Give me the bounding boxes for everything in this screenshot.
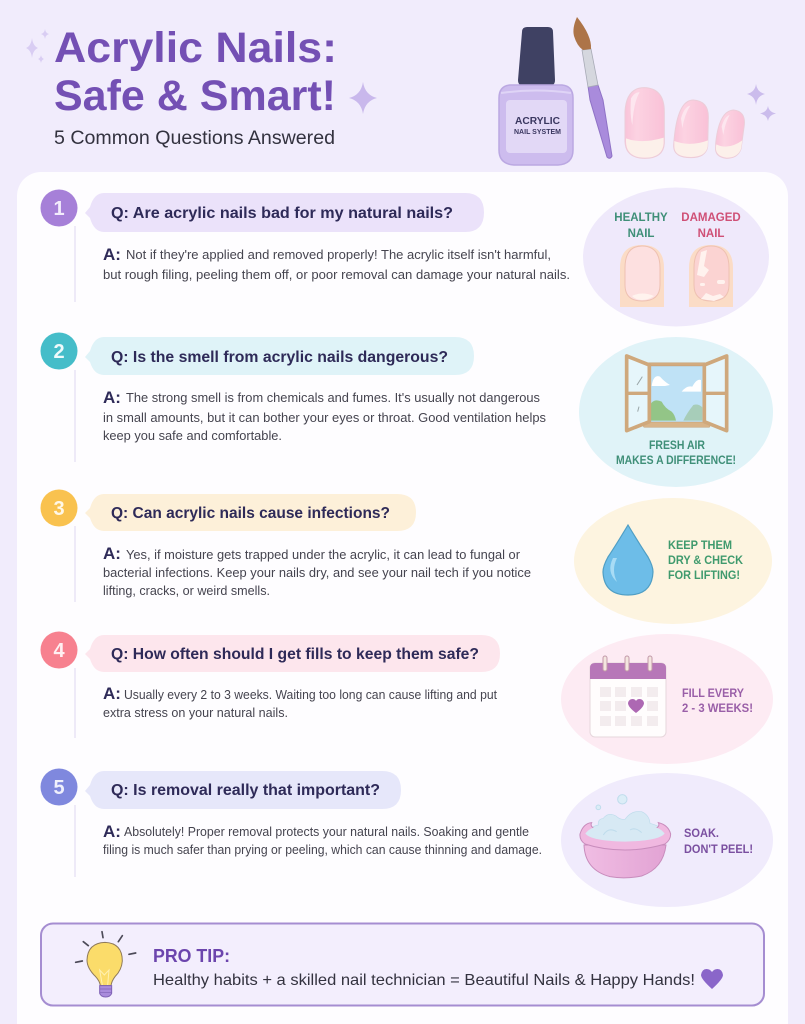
question text 5: Q: Is removal really that important? (111, 782, 380, 799)
title: Acrylic Nails: (54, 24, 337, 72)
title: Safe & Smart! (54, 72, 336, 120)
number badge 3: 3 (53, 498, 65, 520)
icon: soaking bowl (580, 795, 671, 878)
answer 2: keep you safe and comfortable. (103, 429, 282, 443)
panel: nail comparison bubble (583, 188, 769, 326)
panel: question 4 (40, 632, 500, 738)
answer 5 (103, 822, 542, 857)
answer 4: extra stress on your natural nails. (103, 706, 288, 720)
pro tip heading: PRO TIP: (153, 946, 230, 966)
icon: header sparkles right (747, 84, 776, 121)
question pill 4 (85, 635, 500, 672)
panel: question 3 (40, 490, 531, 602)
answer 5: Absolutely! Proper removal protects your natural nails. Soaking and gentle (124, 825, 529, 839)
icon: water drop (603, 525, 653, 595)
keep dry caption: FOR LIFTING! (668, 570, 740, 582)
answer 1: Not if they're applied and removed properly! The acrylic itself isn't harmful, (126, 248, 551, 262)
damaged nail label (681, 212, 741, 240)
healthy nail label: NAIL (628, 228, 654, 240)
question pill 1 (85, 193, 484, 232)
answer 5: filing is much safer than prying or peeling, which can cause thinning and damage. (103, 843, 542, 857)
icon: damaged nail (689, 245, 733, 307)
question pill 3 (85, 494, 416, 531)
subtitle: 5 Common Questions Answered (54, 128, 335, 149)
fill caption: FILL EVERY (682, 688, 744, 700)
soak caption: DON'T PEEL! (684, 844, 753, 856)
soak caption (684, 828, 753, 856)
soak caption: SOAK. (684, 828, 719, 840)
number badge 5 (40, 768, 78, 806)
fill caption (682, 688, 753, 715)
keep dry caption: KEEP THEM (668, 540, 732, 552)
panel: keep dry bubble (574, 498, 772, 624)
icon: nail polish bottle (499, 27, 573, 165)
label text: ACRYLIC (515, 115, 560, 127)
panel: question 1 (40, 190, 570, 302)
keep dry caption (668, 540, 744, 582)
question text 3: Q: Can acrylic nails cause infections? (111, 505, 390, 522)
number badge 1 (40, 190, 78, 226)
answer 3 (103, 544, 531, 598)
question pill 2 (85, 337, 474, 375)
answer 2 (103, 388, 546, 443)
number badge 5: 5 (53, 777, 65, 799)
answer 2: The strong smell is from chemicals and fumes. It's usually not dangerous (126, 391, 540, 405)
icon: title sparkles (26, 29, 49, 63)
answer 4: A: (103, 684, 121, 703)
healthy nail label (614, 212, 668, 240)
damaged nail label: DAMAGED (681, 212, 741, 224)
number badge 2 (40, 332, 78, 370)
keep dry caption: DRY & CHECK (668, 555, 744, 567)
icon: three acrylic nails (625, 88, 744, 158)
panel: fill schedule bubble (561, 634, 773, 764)
answer 4: Usually every 2 to 3 weeks. Waiting too long can cause lifting and put (124, 688, 498, 702)
number badge 2: 2 (53, 341, 65, 363)
panel: soak bubble (561, 773, 773, 907)
title (54, 24, 337, 120)
number badge 4 (40, 632, 78, 668)
question text 4: Q: How often should I get fills to keep them safe? (111, 646, 479, 663)
answer 5: A: (103, 822, 121, 841)
answer 3: A: (103, 544, 121, 563)
icon: brush (573, 17, 612, 158)
panel: question 5 (40, 768, 542, 877)
fill caption: 2 - 3 WEEKS! (682, 703, 753, 715)
answer 3: bacterial infections. Keep your nails dry, and see your nail tech if you notice (103, 566, 531, 580)
panel: fresh air bubble (579, 337, 773, 487)
label text (514, 115, 561, 136)
icon: healthy nail (620, 245, 664, 307)
damaged nail label: NAIL (698, 228, 724, 240)
panel: pro tip (41, 924, 764, 1006)
pro tip text: Healthy habits + a skilled nail technician = Beautiful Nails & Happy Hands! (153, 972, 695, 989)
answer 2: A: (103, 388, 121, 407)
fresh air caption: FRESH AIR (649, 440, 706, 452)
number badge 3 (40, 490, 78, 526)
fresh air caption (616, 440, 736, 467)
question text 2: Q: Is the smell from acrylic nails dangerous? (111, 349, 448, 366)
answer 3: Yes, if moisture gets trapped under the acrylic, it can lead to fungal or (126, 548, 520, 562)
question text 1: Q: Are acrylic nails bad for my natural nails? (111, 205, 453, 222)
question pill 5 (85, 771, 401, 809)
icon: calendar (590, 656, 666, 737)
panel: question 2 (40, 332, 546, 462)
answer 1: A: (103, 245, 121, 264)
number badge 1: 1 (53, 198, 65, 220)
answer 1: but rough filing, peeling them off, or poor removal can damage your natural nails. (103, 268, 570, 282)
answer 3: lifting, cracks, or weird smells. (103, 584, 270, 598)
icon: heart (701, 969, 723, 989)
answer 1 (103, 245, 570, 282)
icon: large sparkle (349, 82, 377, 114)
number badge 4: 4 (53, 640, 65, 662)
fresh air caption: MAKES A DIFFERENCE! (616, 455, 736, 467)
answer 2: in small amounts, but it can bother your eyes or throat. Good ventilation helps (103, 411, 546, 425)
answer 4 (103, 684, 498, 720)
icon: open window (627, 356, 727, 431)
icon: light bulb (76, 932, 136, 997)
panel: questions card (17, 172, 788, 1024)
healthy nail label: HEALTHY (614, 212, 668, 224)
label text: NAIL SYSTEM (514, 127, 561, 136)
